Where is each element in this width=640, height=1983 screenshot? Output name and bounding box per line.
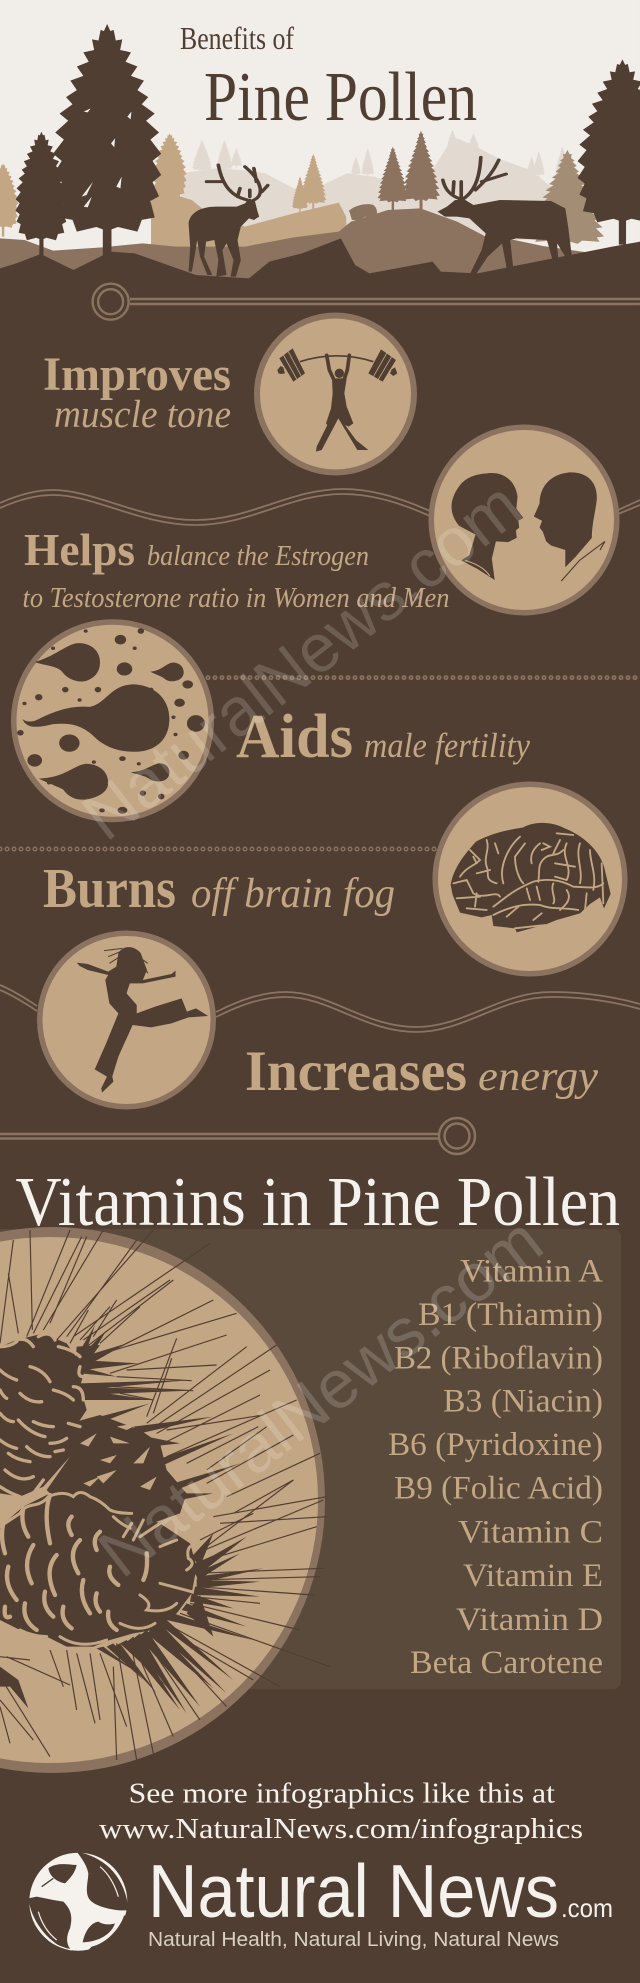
vitamins list: Vitamin C	[458, 1515, 603, 1551]
panel: vitamins list background	[0, 1229, 621, 1689]
heading: burns: Burns	[43, 858, 176, 920]
footer text: url: www.NaturalNews.com/infographics	[99, 1814, 583, 1845]
vitamins list: Vitamin D	[456, 1602, 603, 1638]
icon: left deer	[189, 165, 268, 277]
heading: helps: Helps	[24, 524, 135, 575]
upper pine cone and needles	[0, 1230, 327, 1530]
bottom ring divider	[0, 1118, 475, 1154]
title: pine pollen: Pine Pollen	[204, 59, 477, 136]
icon: bear silhouette	[349, 204, 377, 220]
vitamins list	[388, 1254, 603, 1681]
vitamins list: B1 (Thiamin)	[418, 1297, 603, 1333]
dotted divider one	[208, 675, 640, 680]
wave divider two	[0, 985, 640, 1032]
vitamins list: Beta Carotene	[410, 1645, 603, 1681]
ground silhouette	[0, 238, 640, 340]
logo tagline: Natural Health, Natural Living, Natural News	[148, 1929, 559, 1951]
heading: improves: Improves	[43, 348, 231, 401]
vitamins list: Vitamin E	[463, 1558, 603, 1594]
heading: increases: Increases	[245, 1040, 467, 1103]
logo wordmark: natural news: Natural News	[148, 1849, 559, 1933]
watermark: lower: NaturalNews.com	[85, 1202, 556, 1592]
vitamins list: B9 (Folic Acid)	[394, 1470, 603, 1506]
heading: benefits of: Benefits of	[180, 20, 294, 56]
wave divider one	[0, 489, 640, 525]
panel: hormone balance	[22, 424, 620, 616]
icon: sperm cells	[11, 619, 214, 822]
icon: natural news globe logo	[28, 1852, 129, 1953]
panel: muscle tone	[43, 312, 417, 476]
top ring divider	[93, 284, 640, 320]
watermark: upper: NaturalNews.com	[68, 467, 535, 855]
footer text: see more: See more infographics like this at	[129, 1779, 555, 1810]
vitamins list: B3 (Niacin)	[443, 1384, 603, 1420]
heading: aids: Aids	[236, 703, 353, 771]
icon: man and woman profiles	[428, 424, 620, 616]
text: off brain fog: off brain fog	[191, 871, 395, 917]
panel: forest header scene	[0, 0, 640, 340]
vitamins list: Vitamin A	[460, 1254, 603, 1290]
text: balance the estrogen: balance the Estrogen	[147, 541, 369, 572]
icon: pine cones and needles	[0, 1227, 330, 1773]
icon: right deer	[438, 157, 572, 275]
text: testosterone ratio: to Testosterone ratio in Women and Men	[22, 583, 450, 614]
panel: brain fog	[43, 782, 628, 976]
vitamins list: B6 (Pyridoxine)	[388, 1427, 603, 1463]
panel: energy	[37, 930, 598, 1110]
logo wordmark: dot com: .com	[561, 1893, 613, 1923]
text: muscle tone: muscle tone	[54, 393, 231, 436]
panel: male fertility	[11, 619, 530, 822]
text: male fertility: male fertility	[364, 726, 530, 765]
icon: jumping woman	[37, 930, 216, 1110]
icon: weightlifter	[254, 312, 417, 476]
lower pine cone and needles	[0, 1480, 330, 1760]
text: energy: energy	[478, 1054, 598, 1100]
icon: brain	[432, 782, 628, 976]
vitamins list: B2 (Riboflavin)	[394, 1340, 603, 1376]
dotted divider two	[0, 846, 437, 852]
